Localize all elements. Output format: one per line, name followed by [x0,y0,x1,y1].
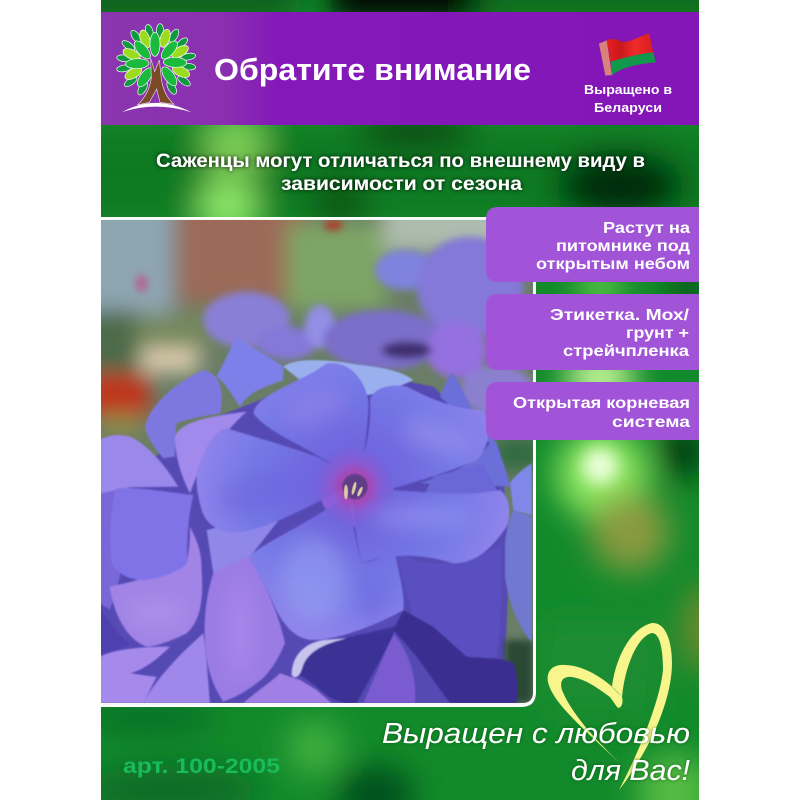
info card: packaging: Этикетка. Мох/ [550,307,690,324]
slogan: для Вас! [571,755,690,787]
info card: roots: Открытая корневая [513,395,690,412]
label: grown in Belarus: Выращено в [584,82,672,97]
infographic canvas [101,0,699,800]
header band [101,12,699,125]
background flowers [135,220,533,415]
title: Обратите внимание [214,52,531,87]
slogan [382,718,690,787]
subtitle [156,151,645,195]
icon: yellow heart [548,623,672,790]
info card: nursery: Растут на [603,220,690,237]
flower centre [334,465,378,508]
flower behind, petals [217,337,283,407]
photo: blue phlox flowers [101,220,533,703]
info card: roots [486,382,699,440]
info card: roots: система [612,414,690,431]
info card: packaging: стрейчпленка [563,343,689,360]
central flower, petals [426,472,497,494]
info card: packaging: грунт + [626,325,689,342]
underlay of petals [100,367,510,703]
article number: арт. 100-2005 [123,755,280,778]
photo frame [101,218,535,706]
green bokeh background [101,0,699,800]
subtitle: Саженцы могут отличаться по внешнему виду в [156,151,645,172]
info card: nursery: открытым небом [536,256,690,273]
label: grown in Belarus: Беларуси [594,100,662,115]
label: grown in Belarus [584,82,672,115]
petal tonal streaks [145,388,466,666]
info card: packaging [486,294,699,370]
subtitle: зависимости от сезона [281,174,522,195]
slogan: Выращен с любовью [382,718,690,750]
info card: nursery: питомнике под [556,238,690,255]
icon: tree logo [116,24,196,112]
icon: Belarus flag [599,33,656,76]
info card: nursery [486,207,699,282]
blurred garden background [101,220,533,480]
